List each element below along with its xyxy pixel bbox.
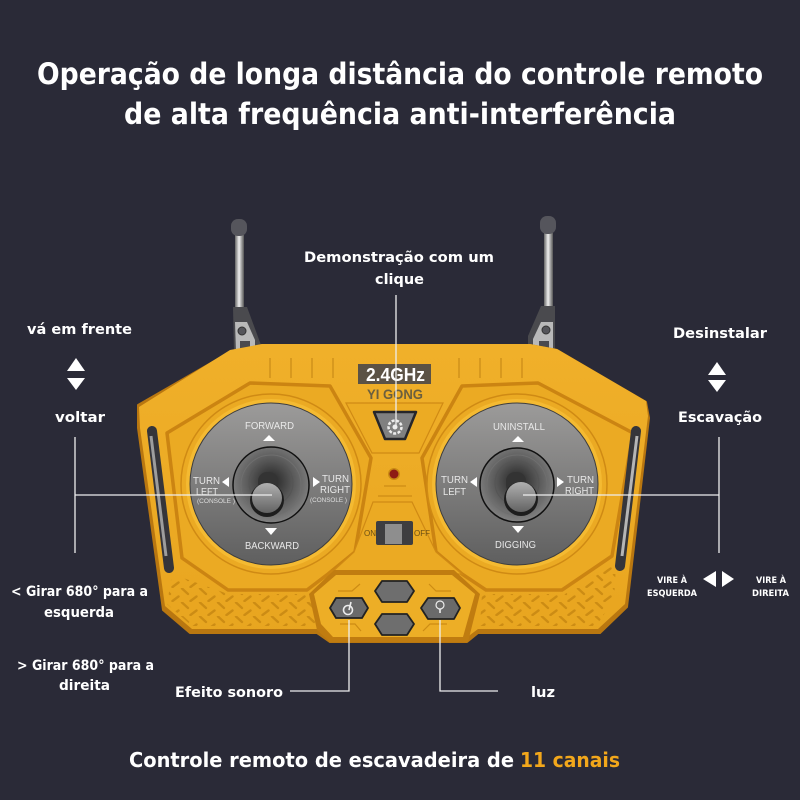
label: turn left: VIRE À bbox=[657, 574, 687, 586]
label: rotate left: < Girar 680° para a bbox=[11, 584, 148, 600]
label: light: luz bbox=[531, 685, 555, 701]
icon: left side grip bbox=[151, 431, 169, 568]
dial labels: FORWARD bbox=[245, 420, 294, 432]
label: rotate right bbox=[17, 658, 154, 694]
button: light bbox=[421, 598, 460, 619]
dial labels: LEFT bbox=[196, 486, 219, 498]
dial labels: RIGHT bbox=[320, 484, 351, 496]
icon: power LED bbox=[388, 468, 400, 480]
left joystick dial bbox=[181, 394, 361, 574]
leader line: sound effect bbox=[290, 620, 349, 691]
joystick stick bbox=[250, 472, 284, 517]
badge: 2.4GHz: 2.4GHz bbox=[366, 365, 425, 385]
groove marks bbox=[338, 486, 451, 631]
panel: center switch surround bbox=[330, 502, 462, 574]
dial labels: TURN bbox=[441, 474, 468, 486]
label: turn right bbox=[752, 574, 789, 599]
icon: left antenna bbox=[231, 219, 261, 353]
power switch bbox=[364, 521, 430, 545]
icon: up and down arrows left bbox=[67, 358, 85, 390]
power switch: ON bbox=[364, 529, 376, 538]
dial labels: TURN bbox=[567, 474, 594, 486]
label: uninstall: Desinstalar bbox=[673, 326, 768, 342]
right joystick dial bbox=[427, 394, 607, 574]
label: turn left bbox=[647, 574, 697, 599]
dial labels bbox=[441, 421, 595, 551]
dial labels: LEFT bbox=[443, 486, 467, 498]
panel: right joystick housing bbox=[422, 383, 633, 590]
label: sound effect: Efeito sonoro bbox=[175, 685, 283, 701]
dial labels: (CONSOLE ) bbox=[310, 497, 347, 504]
label: rotate left bbox=[11, 584, 148, 621]
diamond plate right bbox=[480, 564, 616, 626]
label: turn left: ESQUERDA bbox=[647, 589, 697, 599]
icon: left and right arrows bbox=[703, 571, 734, 587]
leader line: light bbox=[440, 620, 498, 691]
diamond plate left bbox=[167, 574, 316, 626]
leader line: left joystick bbox=[75, 437, 272, 553]
joystick stick bbox=[504, 472, 538, 516]
button: sound effect bbox=[330, 598, 368, 618]
label: rotate right: > Girar 680° para a bbox=[17, 658, 154, 674]
label: rotate left: esquerda bbox=[44, 605, 114, 621]
badge: 2.4GHz bbox=[358, 364, 431, 402]
footer caption: 11 canais bbox=[520, 748, 620, 772]
icon: right side grip bbox=[620, 431, 637, 566]
leader line: right joystick bbox=[523, 437, 719, 553]
dial labels: (CONSOLE ) bbox=[197, 498, 235, 505]
leader line: one-click demo bbox=[395, 295, 397, 428]
label: go back: voltar bbox=[55, 410, 106, 426]
joystick well bbox=[480, 448, 554, 522]
dial labels: TURN bbox=[193, 475, 220, 487]
button: center top bbox=[375, 581, 414, 602]
title: de alta frequência anti-interferência bbox=[124, 97, 676, 131]
icon: right antenna bbox=[528, 216, 556, 353]
label: one-click demo bbox=[304, 250, 494, 288]
icon: up and down arrows right bbox=[708, 362, 726, 392]
button: one-click demo bbox=[374, 412, 416, 439]
remote control body bbox=[138, 344, 649, 642]
panel: bottom control bbox=[309, 570, 480, 642]
footer caption: Controle remoto de escavadeira de bbox=[129, 748, 514, 772]
label: digging: Escavação bbox=[678, 410, 762, 426]
dial labels: DIGGING bbox=[495, 539, 536, 551]
button: center bottom bbox=[375, 614, 414, 635]
joystick well bbox=[233, 447, 309, 523]
badge: 2.4GHz: YI GONG bbox=[367, 386, 423, 402]
label: one-click demo: Demonstração com um bbox=[304, 250, 494, 266]
label: rotate right: direita bbox=[59, 678, 110, 694]
dial labels: BACKWARD bbox=[245, 540, 299, 552]
dial labels: TURN bbox=[322, 473, 349, 485]
label: turn right: DIREITA bbox=[752, 589, 789, 599]
dial labels: RIGHT bbox=[565, 485, 595, 497]
label: one-click demo: clique bbox=[375, 272, 424, 288]
label: go forward: vá em frente bbox=[27, 322, 132, 338]
dial labels bbox=[193, 420, 351, 552]
label: turn right: VIRE À bbox=[756, 574, 786, 586]
title bbox=[37, 57, 763, 131]
panel: left joystick housing bbox=[167, 383, 371, 590]
dial labels: UNINSTALL bbox=[493, 421, 545, 433]
power switch: OFF bbox=[414, 529, 430, 538]
panel: center upper bbox=[346, 403, 443, 453]
top ribs bbox=[270, 358, 522, 378]
